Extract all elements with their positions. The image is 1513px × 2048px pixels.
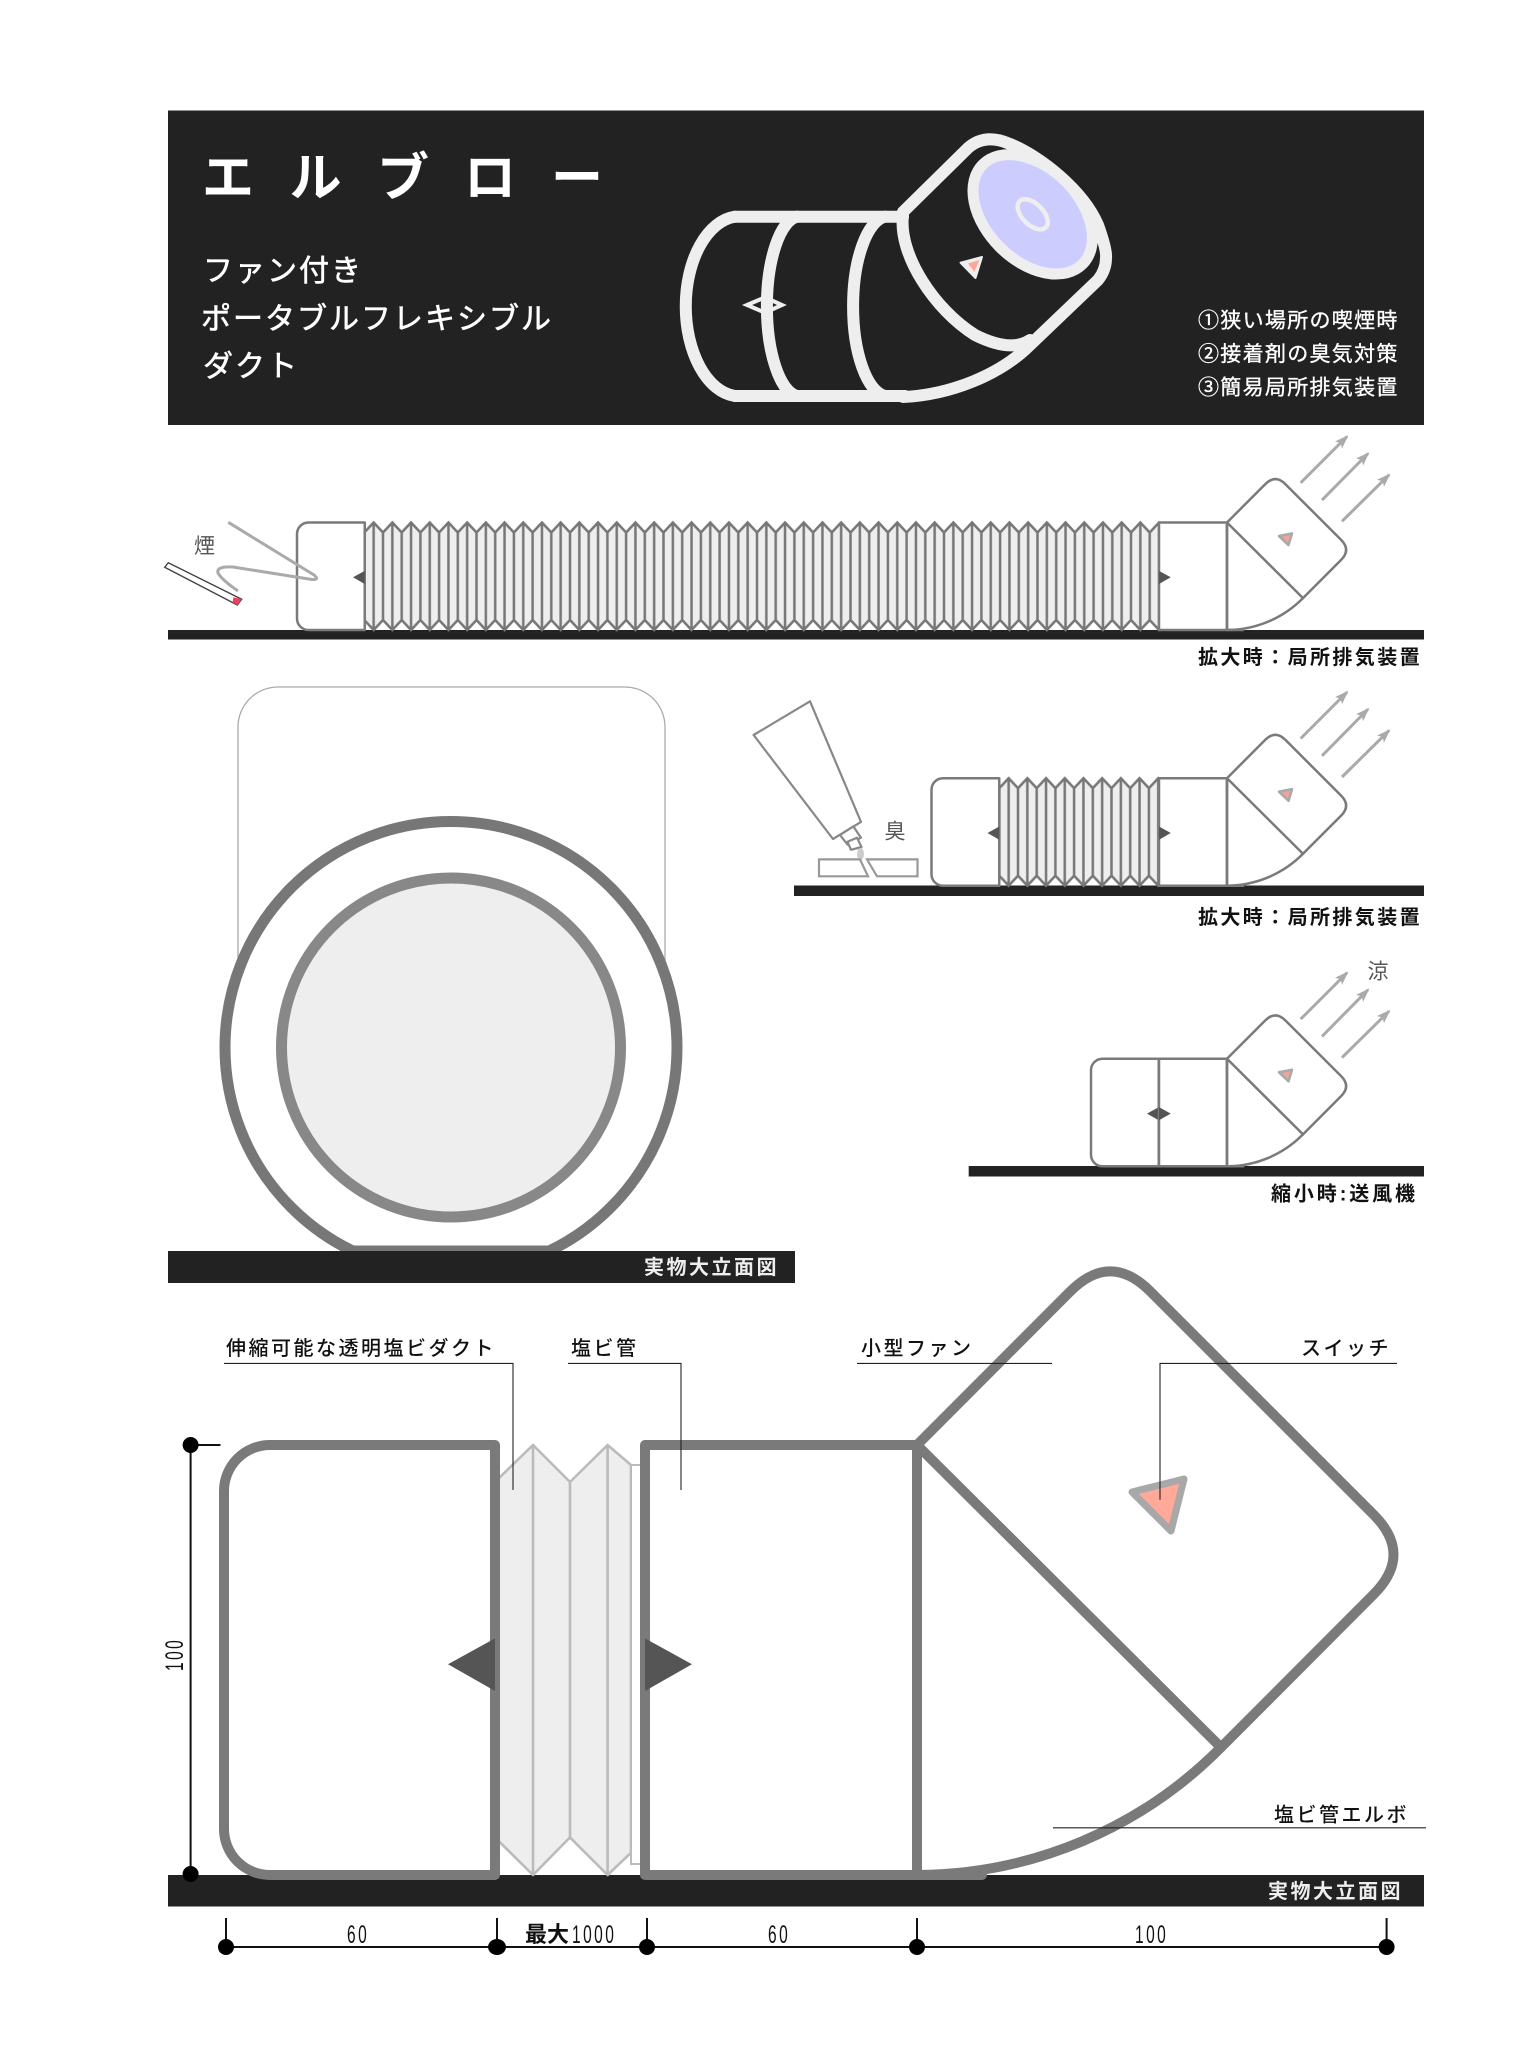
left pipe [224, 1445, 495, 1875]
smoke [218, 522, 317, 591]
callout: PVC pipe [568, 1337, 681, 1490]
inner ring [282, 878, 620, 1217]
smoke label: 煙 [194, 535, 215, 558]
outer ring [225, 822, 677, 1274]
dimension: horizontal chain [218, 1918, 1395, 1955]
callout: flexible duct: 伸縮可能な透明塩ビダクト [226, 1337, 496, 1360]
dimension: horizontal chain: 最大 [525, 1922, 569, 1947]
exhaust arrows [1301, 436, 1389, 521]
callout: flexible duct [224, 1337, 513, 1490]
dimension: height 100: 100 [161, 1638, 189, 1671]
callout: PVC pipe: 塩ビ管 [571, 1337, 638, 1360]
view 2: partly extended duct with glue [754, 692, 1424, 929]
elbow and fan [1159, 735, 1346, 886]
left pipe [297, 522, 365, 630]
bonded material [819, 859, 918, 876]
icon: switch [960, 257, 982, 278]
caption: 拡大時：局所排気装置 [1198, 646, 1422, 669]
bellows [495, 1445, 641, 1875]
header panel [168, 110, 1424, 425]
switch [1279, 1070, 1292, 1081]
ground bar [168, 630, 1424, 640]
switch [1279, 789, 1292, 801]
handle outline [238, 687, 665, 1010]
switch [1132, 1479, 1184, 1531]
use-case list: ②接着剤の臭気対策 [1198, 343, 1399, 366]
glue drop [857, 848, 864, 860]
left pipe [932, 778, 999, 886]
caption on ground bar: 実物大立面図 [1268, 1880, 1403, 1903]
exhaust arrows [1301, 973, 1389, 1058]
subtitle: ファン付き [203, 255, 363, 288]
dimension: horizontal chain: 60 [768, 1921, 790, 1949]
ground bar with caption: 実物大立面図 [644, 1256, 779, 1279]
subtitle: ダクト [203, 350, 299, 384]
odor label: 臭 [884, 820, 906, 844]
view 1: fully extended duct with cigarette [165, 436, 1424, 669]
bellows [364, 520, 1159, 632]
exhaust arrows [1301, 692, 1389, 777]
illustration: 3D elbow duct [686, 132, 1115, 397]
dimension: horizontal chain: 60 [347, 1921, 369, 1949]
callout: switch: スイッチ [1301, 1338, 1391, 1360]
dimension: height 100 [161, 1437, 220, 1882]
use-case list: ③簡易局所排気装置 [1198, 376, 1399, 400]
elbow and fan [1159, 479, 1346, 630]
switch [1279, 534, 1292, 545]
ground bar with caption [168, 1251, 795, 1283]
title: エルブロー [202, 150, 603, 208]
subtitle: ポータブルフレキシブル [201, 303, 553, 336]
callout: PVC elbow: 塩ビ管エルボ [1274, 1803, 1409, 1826]
elbow and fan [1159, 1015, 1346, 1166]
front elevation: circular section [168, 687, 795, 1283]
glue tube [754, 701, 862, 850]
dimension: horizontal chain: 1000 [572, 1921, 616, 1949]
callout: switch [1160, 1338, 1397, 1500]
use-case list [1198, 310, 1399, 400]
cool label: 涼 [1368, 960, 1388, 984]
ground bar [168, 1875, 1424, 1906]
left pipe [1091, 1059, 1159, 1166]
caption: 拡大時：局所排気装置 [1198, 906, 1422, 929]
cigarette [165, 563, 242, 605]
callout: small fan: 小型ファン [861, 1337, 974, 1360]
ground bar [794, 886, 1424, 896]
caption: 縮小時:送風機 [1271, 1182, 1418, 1206]
bellows [999, 776, 1159, 888]
use-case list: ①狭い場所の喫煙時 [1198, 310, 1399, 332]
dimension: horizontal chain: 100 [1135, 1921, 1168, 1949]
ground bar [969, 1166, 1424, 1176]
subtitle [201, 255, 553, 384]
large elevation drawing [161, 1271, 1426, 1955]
elbow and fan [645, 1271, 1394, 1875]
view 3: retracted duct as fan [969, 960, 1424, 1206]
